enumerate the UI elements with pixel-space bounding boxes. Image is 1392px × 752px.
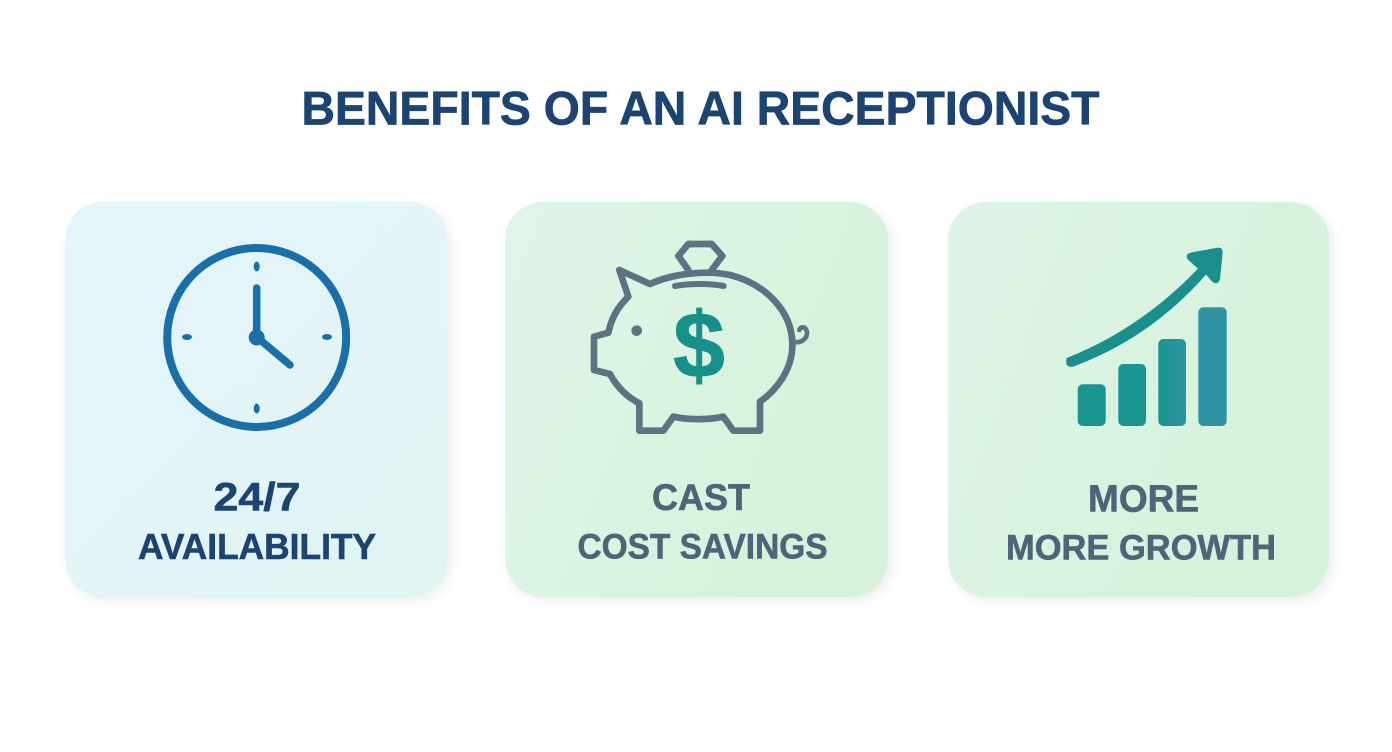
icon: dollar sign: $ <box>673 293 725 397</box>
icon: clock <box>167 248 346 427</box>
label: more growth: MORE GROWTH <box>1006 528 1276 568</box>
label: availability: AVAILABILITY <box>138 526 376 567</box>
title: BENEFITS OF AN AI RECEPTIONIST <box>302 82 1100 134</box>
icon: growth chart <box>1066 248 1227 426</box>
label: 24/7: 24/7 <box>214 476 300 520</box>
label: more: MORE <box>1088 478 1199 520</box>
panel: 24/7 availability <box>65 202 451 601</box>
label: cast: CAST <box>652 477 750 518</box>
panel: more growth <box>948 202 1333 601</box>
panel: cost savings <box>505 202 892 601</box>
label: cost savings: COST SAVINGS <box>578 528 828 566</box>
icon: piggy bank <box>594 244 807 431</box>
